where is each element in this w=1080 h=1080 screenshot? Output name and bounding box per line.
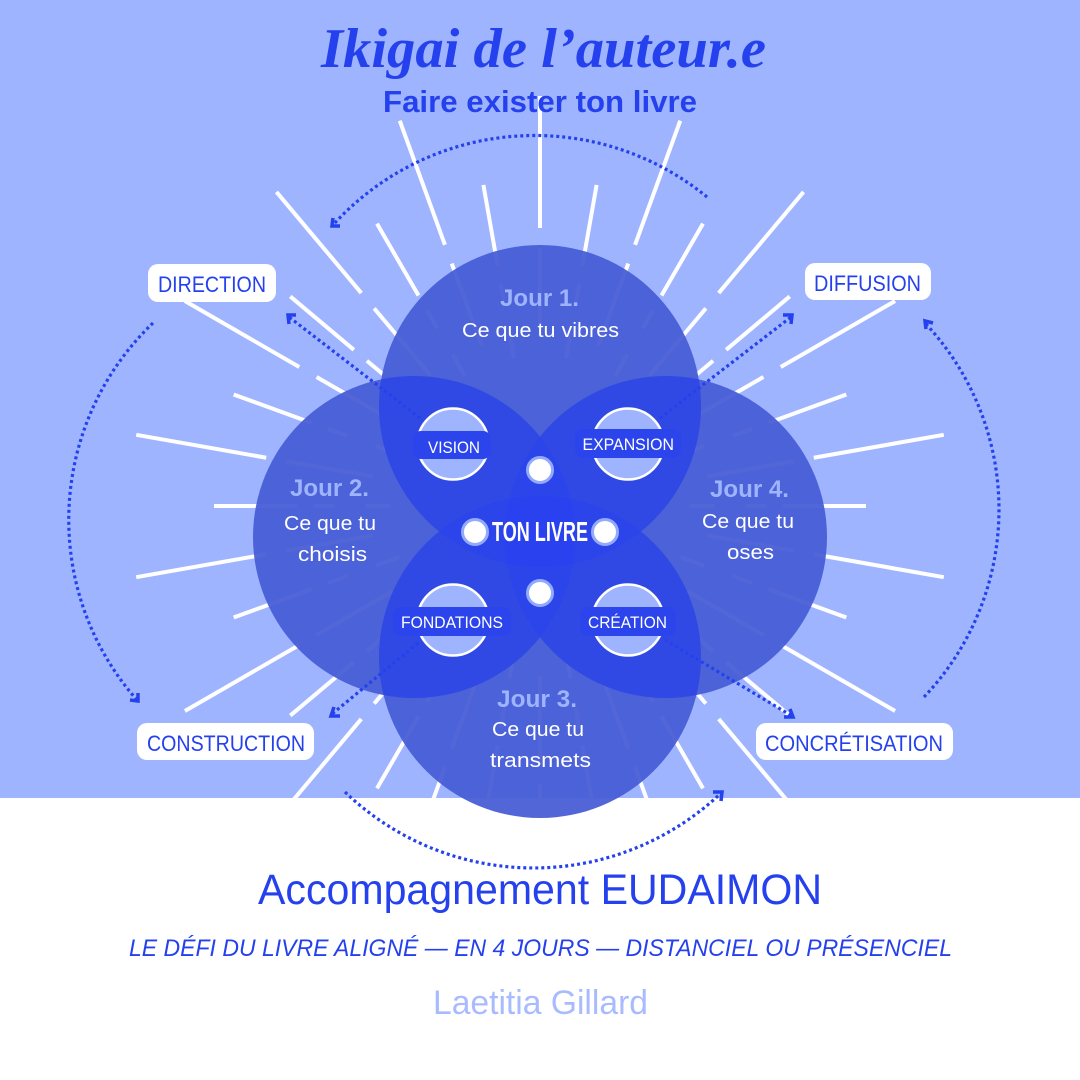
badge: expansion (575, 408, 681, 480)
text: jour 4: Jour 4. (710, 476, 789, 503)
arrow: right arc (924, 321, 999, 697)
badge: fondations (393, 584, 511, 656)
arrow: création to concrétisation (665, 640, 793, 717)
badge: expansion: EXPANSION (582, 436, 674, 454)
tagline: LE DÉFI DU LIVRE ALIGNÉ — EN 4 JOURS — DISTANCIEL OU PRÉSENCIEL (129, 935, 952, 962)
subtitle: Faire exister ton livre (383, 84, 697, 119)
overlap: jour 3 and jour 2 (379, 532, 540, 698)
overlap: jour 1 and jour 2 (379, 376, 540, 532)
label: construction (137, 723, 314, 760)
label: direction (148, 264, 276, 302)
text: jour 2: Jour 2. (290, 475, 369, 502)
arrow: expansion to diffusion (660, 315, 792, 418)
badge: création: CRÉATION (588, 613, 667, 632)
overlap: jour 1 and jour 3 (379, 496, 701, 818)
heading: accompagnement: Accompagnement EUDAIMON (258, 866, 822, 914)
overlap: jour 2 and jour 4 (505, 376, 827, 698)
badge: fondations: FONDATIONS (401, 614, 503, 632)
overlap: centre (505, 376, 827, 698)
arrow: bottom arc (345, 792, 722, 868)
text: jour 4 (702, 476, 794, 564)
text: jour 1 (462, 285, 619, 342)
centre label: TON LIVRE (492, 516, 588, 547)
arrow: vision to direction (288, 315, 420, 418)
text: jour 4: Ce que tu (702, 511, 794, 533)
circle: jour 1 (379, 245, 701, 567)
background panel (0, 0, 1080, 798)
title: Ikigai de l’auteur.e (320, 18, 766, 80)
arrow: left arc (69, 323, 153, 701)
label: direction: DIRECTION (158, 272, 266, 297)
label: diffusion (805, 263, 931, 300)
overlap: jour 3 and jour 4 (540, 532, 701, 698)
text: jour 2 (284, 475, 376, 566)
text: jour 3: Ce que tu (492, 719, 584, 741)
badge: vision (413, 408, 491, 480)
arrow: fondations to construction (331, 643, 418, 716)
circle: jour 3 (379, 496, 701, 818)
text: jour 3: Jour 3. (497, 686, 577, 713)
badge: vision: VISION (428, 439, 480, 457)
text: jour 2: choisis (298, 544, 367, 566)
label: construction: CONSTRUCTION (147, 731, 305, 756)
text: jour 3 (490, 686, 591, 772)
text: jour 1: Jour 1. (500, 285, 579, 312)
circle: jour 4 (505, 376, 827, 698)
label: concrétisation: CONCRÉTISATION (765, 731, 943, 756)
overlap: jour 1 and jour 4 (540, 376, 701, 532)
sun rays (136, 96, 944, 916)
label: diffusion: DIFFUSION (814, 271, 921, 296)
text: jour 4: oses (727, 542, 774, 564)
centre dots (462, 458, 618, 606)
badge: création (580, 584, 676, 656)
venn diagram (253, 245, 827, 818)
text: jour 3: transmets (490, 750, 591, 772)
text: jour 2: Ce que tu (284, 513, 376, 535)
circle: jour 2 (253, 376, 575, 698)
author: Laetitia Gillard (433, 984, 648, 1022)
arrow: top arc (332, 135, 707, 226)
label: concrétisation (756, 723, 953, 760)
text: jour 1: Ce que tu vibres (462, 320, 619, 342)
